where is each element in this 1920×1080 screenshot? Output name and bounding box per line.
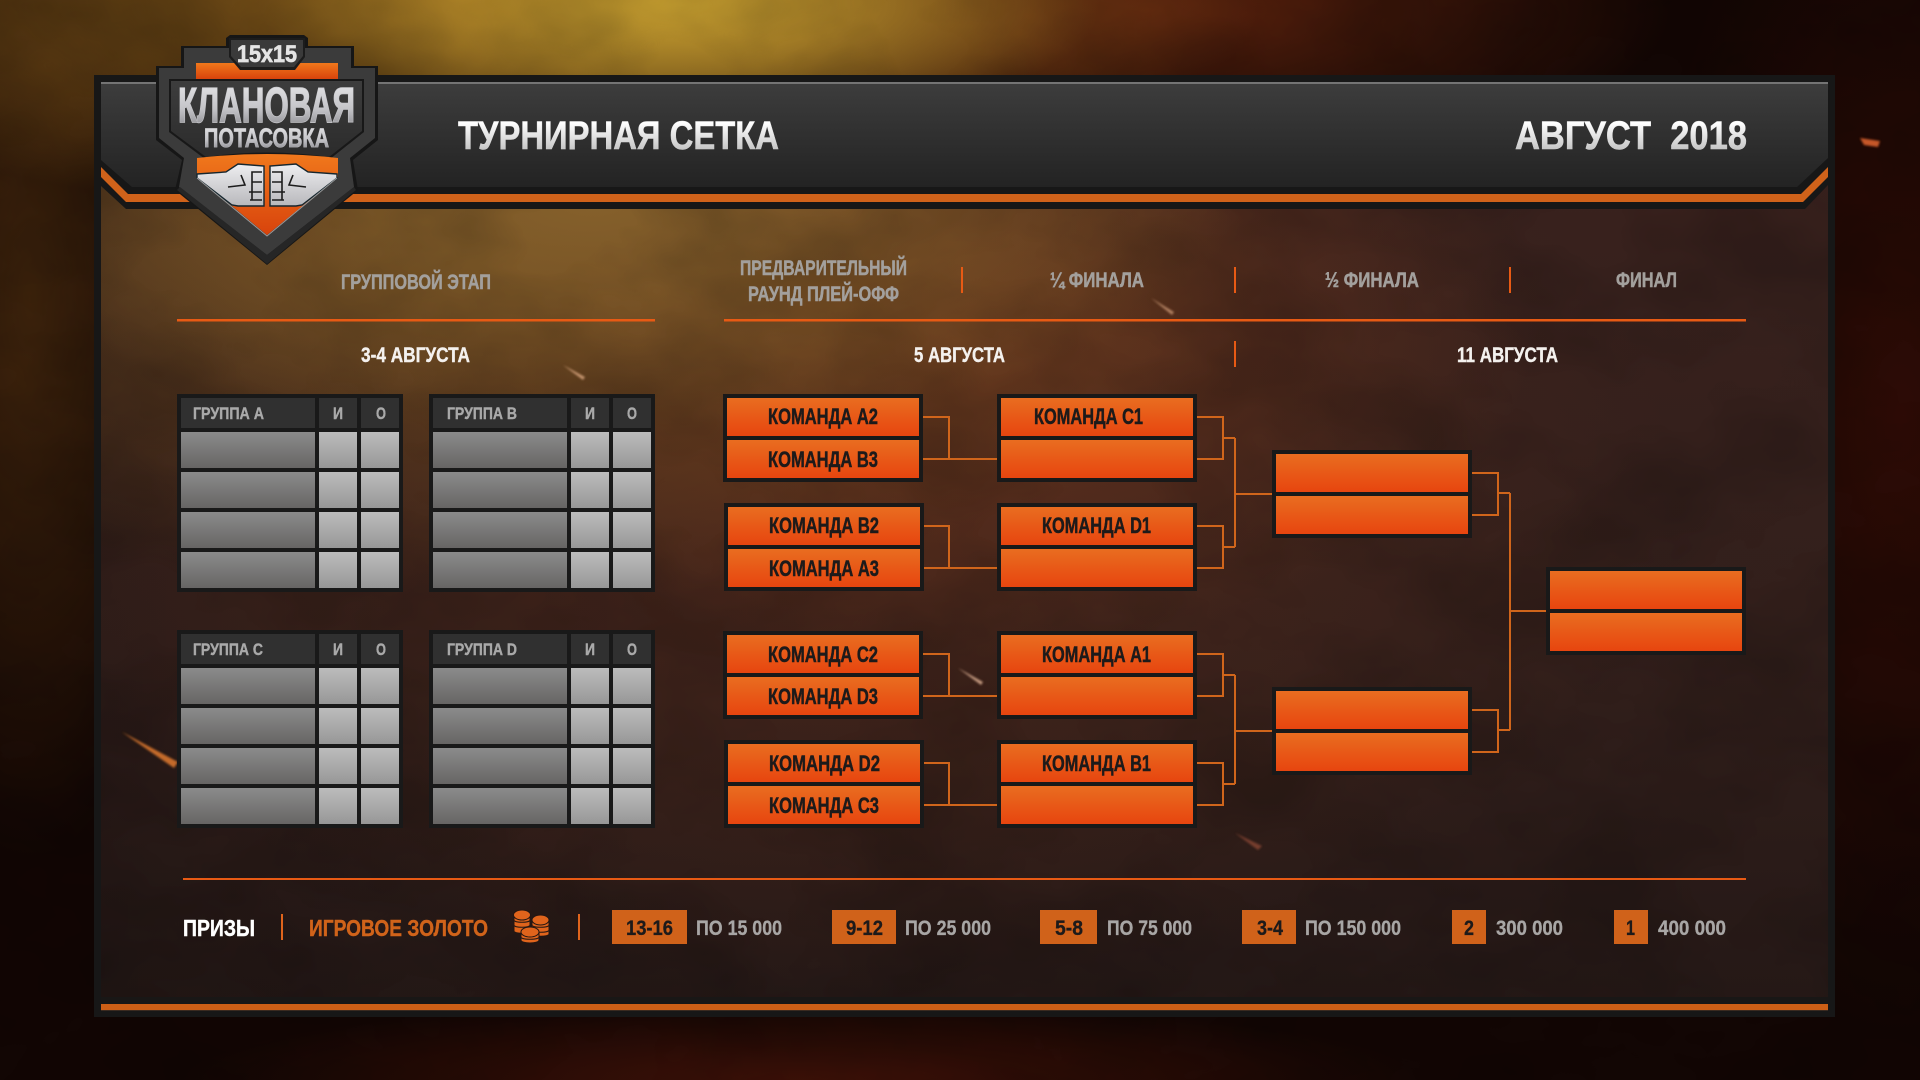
prize: 9-12: 9-12	[846, 917, 883, 940]
prize: 5-8: ПО 75 000	[1107, 917, 1192, 940]
prize: 1: 400 000	[1658, 917, 1726, 940]
quarterfinal: C1	[997, 394, 1197, 482]
icon: gold coins	[514, 910, 549, 943]
group A table: И	[333, 404, 343, 423]
heading: final: ФИНАЛ	[1616, 269, 1677, 292]
match: B2 vs A3	[724, 503, 924, 591]
title: ТУРНИРНАЯ СЕТКА	[458, 114, 779, 158]
panel frame	[94, 75, 1835, 1017]
group C table: ГРУППА С	[193, 640, 263, 659]
heading: preliminary round: РАУНД ПЛЕЙ-ОФФ	[748, 282, 899, 306]
match: D2 vs C3	[724, 740, 924, 828]
logo badge	[156, 35, 378, 265]
group B table: О	[627, 404, 637, 423]
date: 11 August: 11 АВГУСТА	[1457, 344, 1558, 367]
quarterfinal: B1: КОМАНДА B1	[1042, 751, 1151, 776]
match: B2 vs A3: КОМАНДА A3	[769, 556, 879, 581]
logo text: ПОТАСОВКА: ПОТАСОВКА	[204, 123, 329, 153]
heading: semifinal: ½ ФИНАЛА	[1325, 269, 1419, 292]
group D table: ГРУППА D	[447, 640, 517, 659]
quarterfinal: A1	[997, 631, 1197, 719]
bracket connectors	[923, 417, 1546, 805]
prize: 1	[1614, 910, 1726, 944]
match: C2 vs D3: КОМАНДА C2	[768, 642, 878, 667]
prize: 9-12	[832, 910, 991, 944]
group D table: И	[585, 640, 595, 659]
prize: 3-4: 3-4	[1257, 917, 1283, 940]
group D table	[429, 630, 655, 828]
prize: 2: 300 000	[1496, 917, 1563, 940]
date: 3-4 August: 3-4 АВГУСТА	[361, 344, 470, 367]
quarterfinal: D1: КОМАНДА D1	[1042, 513, 1151, 538]
prize: 1: 1	[1626, 917, 1635, 940]
date: 5 August: 5 АВГУСТА	[914, 344, 1005, 367]
match: A2 vs B3	[723, 394, 923, 482]
quarterfinal: A1: КОМАНДА A1	[1042, 642, 1151, 667]
prizes label: ПРИЗЫ	[183, 915, 255, 941]
final	[1546, 567, 1746, 655]
prize: 13-16	[612, 910, 782, 944]
match: C2 vs D3: КОМАНДА D3	[768, 684, 878, 709]
group B table: И	[585, 404, 595, 423]
match: C2 vs D3	[723, 631, 923, 719]
heading: preliminary round	[740, 256, 907, 306]
match: D2 vs C3: КОМАНДА C3	[769, 793, 879, 818]
quarterfinal: C1: КОМАНДА C1	[1034, 404, 1143, 429]
group A table: О	[376, 404, 386, 423]
group A table	[177, 394, 403, 592]
semifinal 2	[1272, 687, 1472, 775]
prize: 5-8	[1040, 910, 1192, 944]
prize: 3-4	[1242, 910, 1401, 944]
date: АВГУСТ 2018	[1515, 114, 1747, 158]
group C table: И	[333, 640, 343, 659]
prize: 3-4: ПО 150 000	[1305, 917, 1401, 940]
prize: 2	[1452, 910, 1563, 944]
group B table: ГРУППА В	[447, 404, 517, 423]
prize: 13-16: 13-16	[626, 917, 673, 940]
prize: 13-16: ПО 15 000	[696, 917, 782, 940]
heading: group stage: ГРУППОВОЙ ЭТАП	[341, 270, 491, 294]
prize: 2: 2	[1464, 917, 1474, 940]
group C table	[177, 630, 403, 828]
match: A2 vs B3: КОМАНДА B3	[768, 447, 878, 472]
icon: fists	[197, 154, 338, 236]
header bar	[101, 82, 1828, 209]
group A table: ГРУППА А	[193, 404, 264, 423]
prize: 9-12: ПО 25 000	[905, 917, 991, 940]
semifinal 1	[1272, 450, 1472, 538]
heading: preliminary round: ПРЕДВАРИТЕЛЬНЫЙ	[740, 256, 907, 280]
prize: 5-8: 5-8	[1055, 917, 1083, 940]
logo text: 15x15: 15x15	[237, 41, 297, 68]
match: A2 vs B3: КОМАНДА A2	[768, 404, 878, 429]
match: B2 vs A3: КОМАНДА B2	[769, 513, 879, 538]
group B table	[429, 394, 655, 592]
heading: quarterfinal: ¼ ФИНАЛА	[1050, 269, 1144, 292]
group C table: О	[376, 640, 386, 659]
logo text: КЛАНОВАЯ: КЛАНОВАЯ	[178, 79, 355, 133]
group D table: О	[627, 640, 637, 659]
match: D2 vs C3: КОМАНДА D2	[769, 751, 880, 776]
gold label: ИГРОВОЕ ЗОЛОТО	[309, 915, 488, 941]
quarterfinal: D1	[997, 503, 1197, 591]
quarterfinal: B1	[997, 740, 1197, 828]
